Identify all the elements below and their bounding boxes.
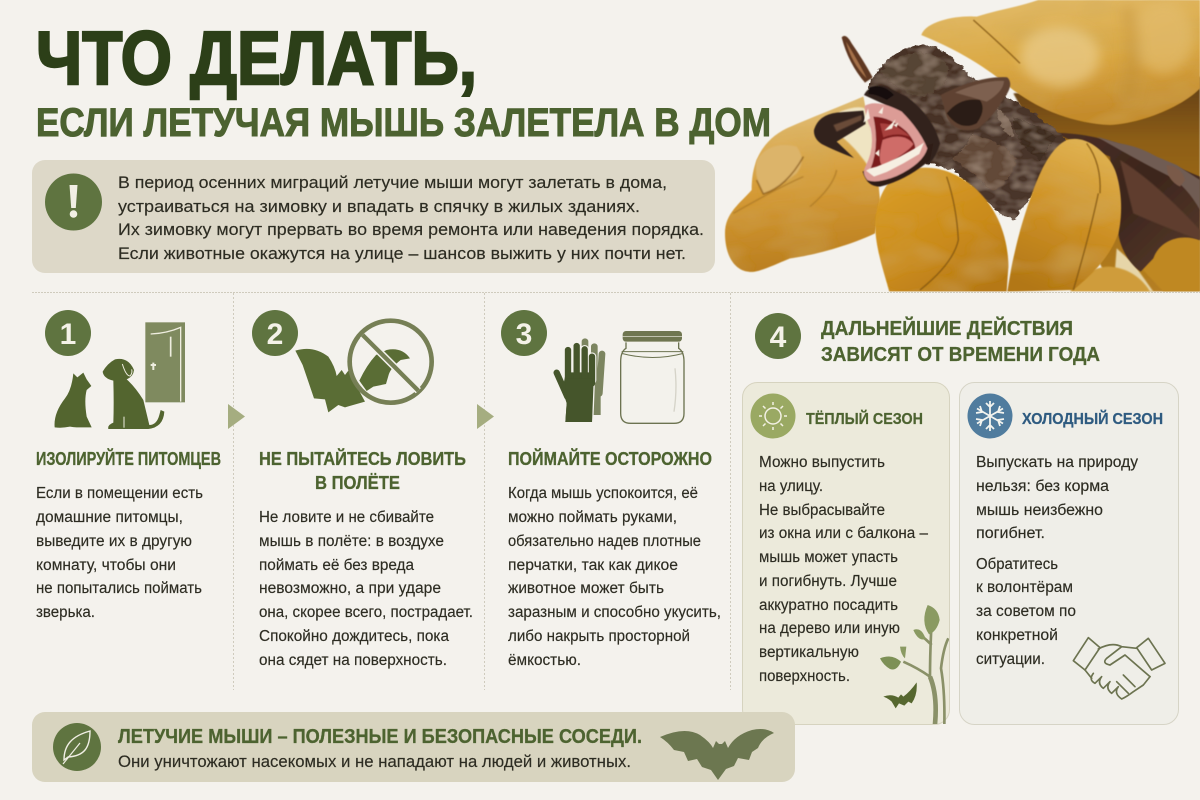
warm season text: мышь может упасть xyxy=(759,549,898,566)
panel: step 4 xyxy=(742,313,1178,724)
heading: isolate pets: ИЗОЛИРУЙТЕ ПИТОМЦЕВ xyxy=(36,448,221,469)
heading: next actions: ЗАВИСЯТ ОТ ВРЕМЕНИ ГОДА xyxy=(821,344,1100,366)
cold season text: погибнет. xyxy=(976,525,1045,542)
top ear xyxy=(842,36,873,83)
card: cold season xyxy=(960,382,1178,724)
cold season text: Выпускать на природу xyxy=(976,454,1138,471)
heading: useful neighbours: ЛЕТУЧИЕ МЫШИ – ПОЛЕЗНЫЕ И БЕЗОПАСНЫЕ СОСЕДИ. xyxy=(118,726,642,748)
body text: она сядет на поверхность. xyxy=(259,652,447,669)
body text: Когда мышь успокоится, её xyxy=(508,485,698,502)
icon: gloves and jar xyxy=(557,331,684,423)
note text: Они уничтожают насекомых и не нападают на людей и животных. xyxy=(118,752,631,771)
heading: cold season: ХОЛОДНЫЙ СЕЗОН xyxy=(1022,409,1163,428)
panel: step 1 xyxy=(36,310,221,621)
cold season text: за советом по xyxy=(976,603,1076,620)
body text xyxy=(508,485,721,669)
warm season text: и погибнуть. Лучше xyxy=(759,573,897,590)
arrow: step 1 to 2 xyxy=(228,404,245,429)
thumb claw wing xyxy=(814,111,866,158)
ear xyxy=(941,77,1010,130)
heading: do not catch in flight xyxy=(259,448,466,493)
icon: snowflake xyxy=(968,394,1012,438)
body text: она, скорее всего, пострадает. xyxy=(259,604,473,621)
intro text: Их зимовку могут прервать во время ремонта или наведения порядка. xyxy=(118,220,704,239)
step number 2 xyxy=(252,310,298,356)
body text: либо накрыть просторной xyxy=(508,628,690,645)
glove: right lower xyxy=(1140,235,1200,292)
mouth cavity xyxy=(870,117,915,172)
body text: не попытались поймать xyxy=(36,580,202,597)
outer jaw xyxy=(862,160,926,188)
cold season text: к волонтёрам xyxy=(976,579,1073,596)
body text: Спокойно дождитесь, пока xyxy=(259,628,449,645)
title xyxy=(36,16,771,145)
icon: crossed-out bat xyxy=(295,321,432,412)
step number 3 xyxy=(501,310,547,356)
left finger details xyxy=(733,107,878,213)
warm season text: на дерево или иную xyxy=(759,620,900,637)
panel: step 3 xyxy=(501,310,721,669)
warm season text: на улицу. xyxy=(759,478,823,495)
heading: catch carefully: ПОЙМАЙТЕ ОСТОРОЖНО xyxy=(508,448,712,469)
body text: невозможно, а при ударе xyxy=(259,580,441,597)
icon: bat silhouette xyxy=(660,729,774,780)
bat wing xyxy=(1053,133,1200,272)
back glove xyxy=(585,342,602,415)
cold season text xyxy=(976,454,1138,668)
warm season text: Можно выпустить xyxy=(759,454,885,471)
icon: handshake xyxy=(1073,638,1165,699)
intro text: Если животные окажутся на улице – шансов выжить у них почти нет. xyxy=(118,244,686,263)
body text: Если в помещении есть xyxy=(36,485,203,502)
pink gums xyxy=(864,103,927,181)
step number 1 xyxy=(45,310,91,356)
body text: комнату, чтобы они xyxy=(36,557,176,574)
panel: warning intro xyxy=(32,160,715,273)
icon: cat, dog and door xyxy=(55,322,185,429)
body text: Не ловите и не сбивайте xyxy=(259,509,434,526)
body text: мышь в полёте: в воздухе xyxy=(259,533,444,550)
cold season text: мышь неизбежно xyxy=(976,502,1103,519)
panel: step 2 xyxy=(252,310,473,669)
warm season text: Не выбрасывайте xyxy=(759,502,885,519)
body text: перчатки, так как дикое xyxy=(508,557,678,574)
back layer shadow xyxy=(1013,77,1200,292)
cold season text: Обратитесь xyxy=(976,556,1058,573)
step number 4 xyxy=(755,313,801,359)
icon: tree with bat xyxy=(880,605,948,724)
heading: do not catch in flight: НЕ ПЫТАЙТЕСЬ ЛОВИТЬ xyxy=(259,448,466,469)
heading: warm season: ТЁПЛЫЙ СЕЗОН xyxy=(806,409,923,428)
body text xyxy=(36,485,203,621)
top finger highlights xyxy=(1020,0,1193,103)
arrow: step 2 to 3 xyxy=(477,404,494,429)
jar xyxy=(623,331,682,342)
panel: bottom note xyxy=(32,712,795,782)
body text xyxy=(259,509,473,669)
warm season text xyxy=(759,454,928,685)
glove creases xyxy=(920,20,1100,290)
icon: exclamation mark xyxy=(45,174,102,230)
tongue xyxy=(880,137,913,166)
main heading: ЧТО ДЕЛАТЬ, xyxy=(36,16,477,100)
warm season text: поверхность. xyxy=(759,668,850,685)
cold season text: нельзя: без корма xyxy=(976,478,1109,495)
heading: next actions: ДАЛЬНЕЙШИЕ ДЕЙСТВИЯ xyxy=(821,316,1073,340)
body text: поймать её без вреда xyxy=(259,557,414,574)
front glove xyxy=(557,346,595,423)
step number 1: 1 xyxy=(60,318,76,351)
body text: зверька. xyxy=(36,604,95,621)
body text: животное может быть xyxy=(508,580,664,597)
glove: top finger xyxy=(921,0,1200,125)
glove: right finger xyxy=(1007,139,1121,292)
warm season text: из окна или с балкона – xyxy=(759,525,928,542)
cold season text: ситуации. xyxy=(976,651,1045,668)
photo: bat held in leather gloves xyxy=(725,0,1200,292)
body text: заразным и способно укусить, xyxy=(508,604,721,621)
bat head fur xyxy=(868,45,977,164)
body text: домашние питомцы, xyxy=(36,509,183,526)
warm season text: аккуратно посадить xyxy=(759,597,898,614)
step number 2: 2 xyxy=(267,318,283,351)
cold season text: конкретной xyxy=(976,627,1058,644)
body text: обязательно надев плотные xyxy=(508,533,701,550)
intro text: устраиваться на зимовку и впадать в спячку в жилых зданиях. xyxy=(118,197,640,216)
step number 3: 3 xyxy=(516,318,532,351)
icon: leaf xyxy=(53,723,101,771)
body text: выведите их в другую xyxy=(36,533,192,550)
step number 4: 4 xyxy=(770,321,787,354)
intro text xyxy=(118,173,704,263)
heading: do not catch in flight: В ПОЛЁТЕ xyxy=(315,473,400,493)
icon: sun xyxy=(750,394,796,438)
card: warm season xyxy=(742,382,950,724)
heading: next actions xyxy=(821,316,1100,366)
bat body fur xyxy=(934,76,1066,220)
teeth xyxy=(863,107,924,177)
glove: left finger xyxy=(725,97,880,272)
body text: ёмкостью. xyxy=(508,652,581,669)
glove: middle finger xyxy=(875,168,1008,292)
body text: можно поймать руками, xyxy=(508,509,677,526)
warm season text: вертикальную xyxy=(759,644,859,661)
subheading: ЕСЛИ ЛЕТУЧАЯ МЫШЬ ЗАЛЕТЕЛА В ДОМ xyxy=(36,101,771,145)
glove: bottom knuckle xyxy=(1070,267,1150,292)
muzzle and mouth xyxy=(863,86,940,187)
dark lip and face stripe xyxy=(864,86,940,165)
intro text: В период осенних миграций летучие мыши могут залетать в дома, xyxy=(118,173,667,192)
